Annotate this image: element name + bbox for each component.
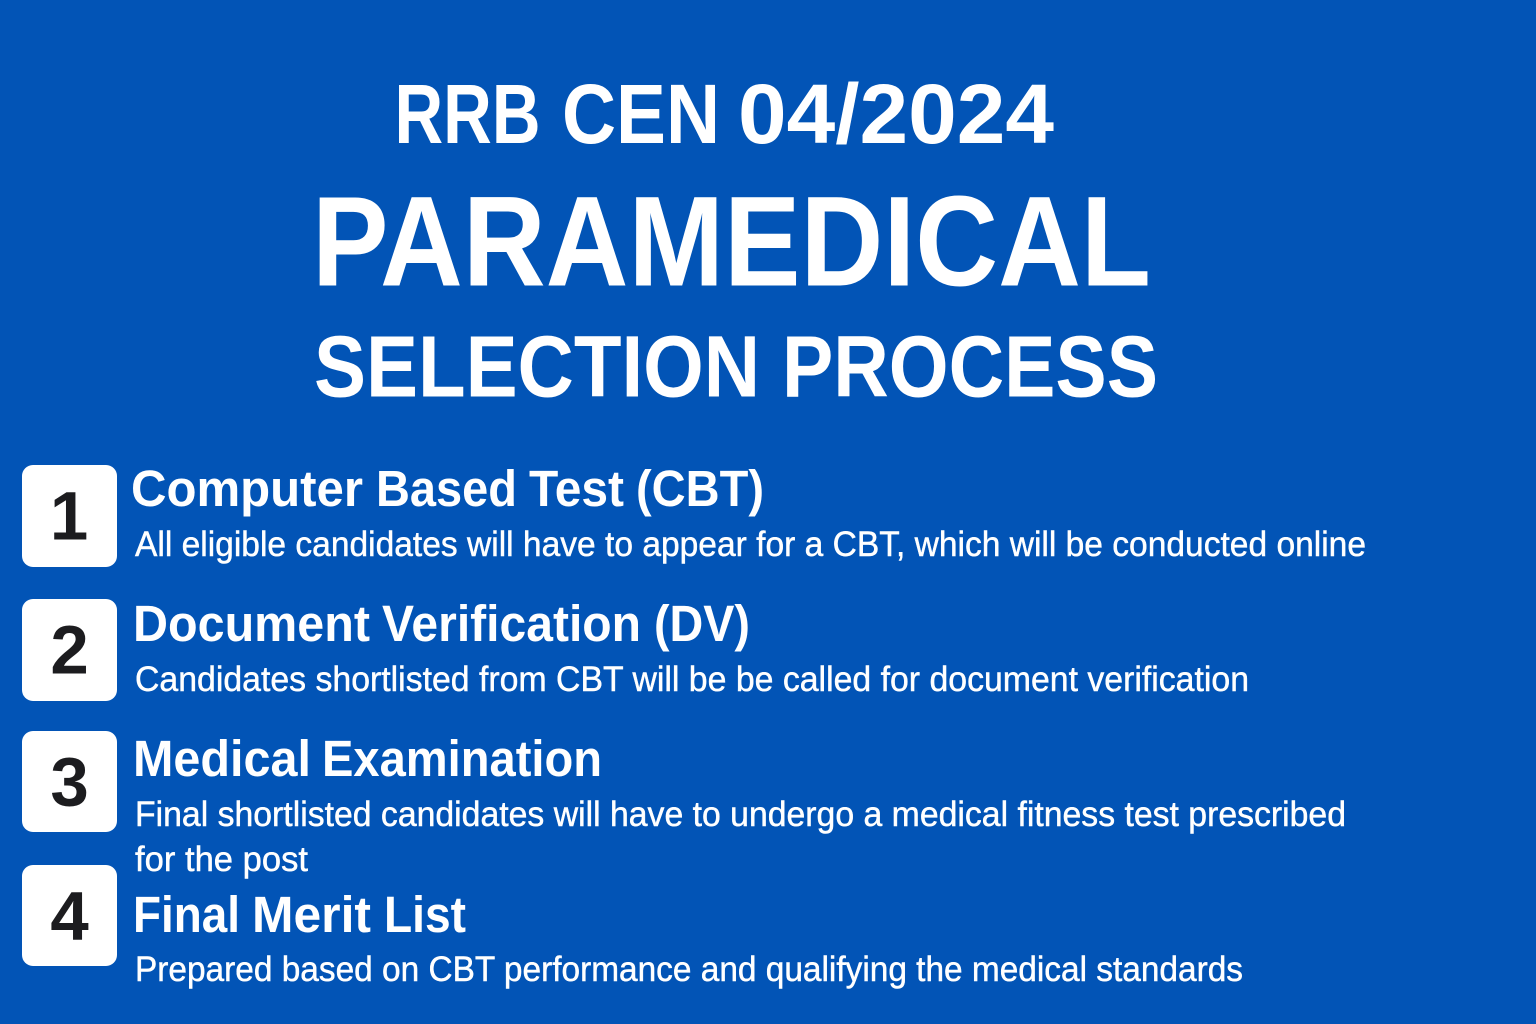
step 2 heading xyxy=(133,595,750,652)
step 4 heading: List xyxy=(384,886,466,943)
step 2 heading: Document xyxy=(133,595,370,652)
number badge 1: 1 xyxy=(50,478,88,554)
step 1 heading: Test xyxy=(529,460,624,517)
number badge 1 xyxy=(22,465,117,567)
step 3 heading xyxy=(133,730,602,787)
title: SELECTION PROCESS xyxy=(314,318,1158,416)
step 3 heading: Examination xyxy=(322,730,602,787)
step 2 heading: Verification xyxy=(382,595,641,652)
step 4 xyxy=(22,865,1243,989)
step 3 description: Final shortlisted candidates will have to undergo a medical fitness test prescribed xyxy=(135,795,1346,834)
step 3 description xyxy=(135,795,1346,879)
step 3 description: for the post xyxy=(135,840,308,879)
title: RRB CEN 04/2024 xyxy=(394,67,1054,161)
step 4 heading: Final xyxy=(133,886,240,943)
step 3 xyxy=(22,730,1346,879)
step 4 description: Prepared based on CBT performance and qualifying the medical standards xyxy=(135,950,1243,989)
number badge 3: 3 xyxy=(50,744,89,820)
step 2 xyxy=(22,595,1249,701)
step 1 heading xyxy=(131,460,764,517)
title: RRB CEN 04/2024: CEN xyxy=(562,67,720,161)
step 1 heading: (CBT) xyxy=(636,460,764,517)
title: PARAMEDICAL: PARAMEDICAL xyxy=(312,170,1151,314)
title: SELECTION PROCESS: SELECTION xyxy=(314,318,760,416)
step 2 description: Candidates shortlisted from CBT will be be called for document verification xyxy=(135,660,1249,699)
number badge 2 xyxy=(22,599,117,701)
step 1 heading: Computer xyxy=(131,460,363,517)
step 3 heading: Medical xyxy=(133,730,311,787)
step 1 description: All eligible candidates will have to appear for a CBT, which will be conducted online xyxy=(135,525,1366,564)
step 1 xyxy=(22,460,1366,567)
number badge 4 xyxy=(22,865,117,966)
number badge 2: 2 xyxy=(50,612,89,688)
title: RRB CEN 04/2024: 04/2024 xyxy=(738,67,1054,161)
title: RRB CEN 04/2024: RRB xyxy=(394,67,540,161)
step 4 heading xyxy=(133,886,466,943)
step 2 heading: (DV) xyxy=(654,595,750,652)
number badge 4: 4 xyxy=(50,878,89,954)
step 4 heading: Merit xyxy=(252,886,371,943)
number badge 3 xyxy=(22,731,117,832)
step 1 heading: Based xyxy=(376,460,517,517)
title: SELECTION PROCESS: PROCESS xyxy=(782,318,1158,416)
